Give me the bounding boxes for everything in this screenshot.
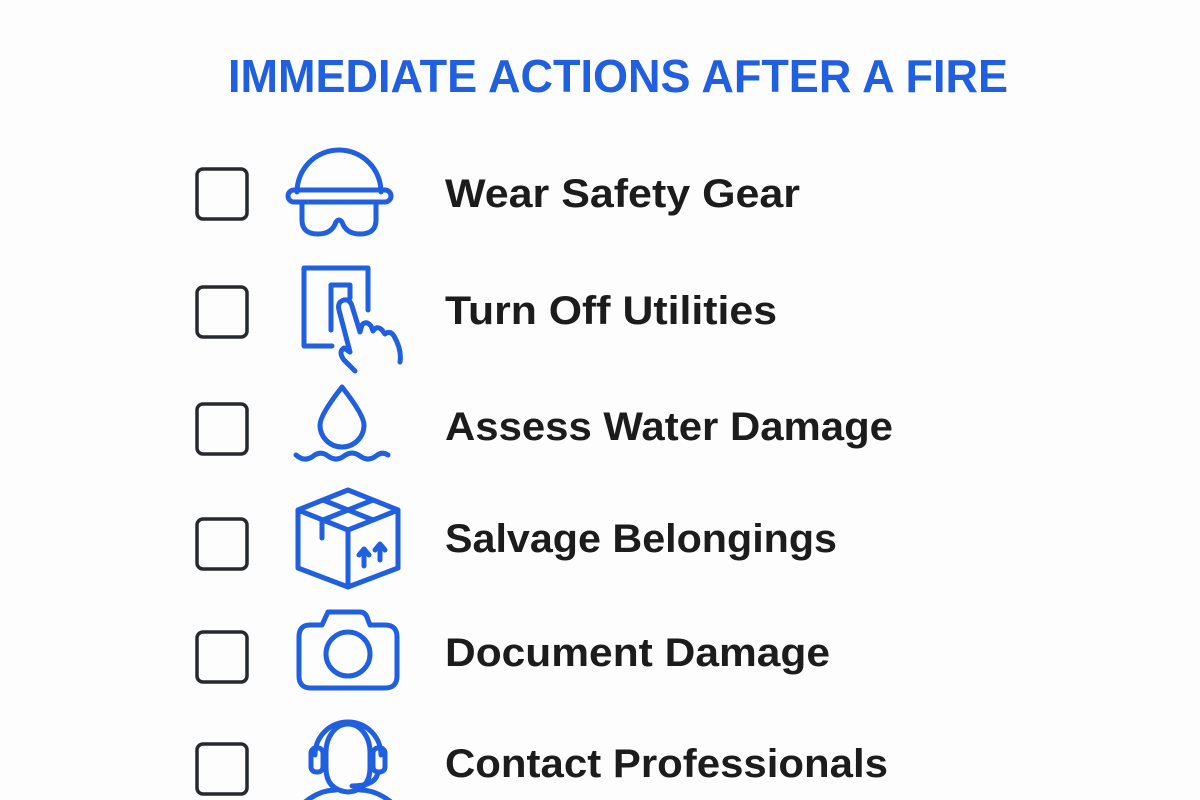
label 5: Document Damage xyxy=(445,631,830,675)
row: wear safety gear xyxy=(197,150,800,234)
checkbox 4 xyxy=(197,519,247,569)
label 4: Salvage Belongings xyxy=(445,517,837,561)
icon: switch with hand xyxy=(304,268,400,371)
icon: box xyxy=(298,490,398,587)
label 3: Assess Water Damage xyxy=(445,405,893,449)
icon: camera xyxy=(299,612,397,688)
icon: helmet with goggles xyxy=(288,150,391,234)
checkbox 6 xyxy=(197,744,247,794)
icon: support agent xyxy=(305,722,391,800)
label 2: Turn Off Utilities xyxy=(445,289,777,333)
label 1: Wear Safety Gear xyxy=(445,172,800,216)
checkbox 1 xyxy=(197,169,247,219)
row: turn off utilities xyxy=(197,268,777,371)
checkbox 5 xyxy=(197,632,247,682)
title: IMMEDIATE ACTIONS AFTER A FIRE xyxy=(228,50,1008,102)
checkbox 2 xyxy=(197,287,247,337)
checkbox 3 xyxy=(197,404,247,454)
row: document damage xyxy=(197,612,830,688)
row: assess water damage xyxy=(197,387,893,459)
row: salvage belongings xyxy=(197,490,837,587)
row: contact professionals xyxy=(197,722,888,800)
icon: water drop xyxy=(296,387,388,459)
label 6: Contact Professionals xyxy=(445,742,888,786)
